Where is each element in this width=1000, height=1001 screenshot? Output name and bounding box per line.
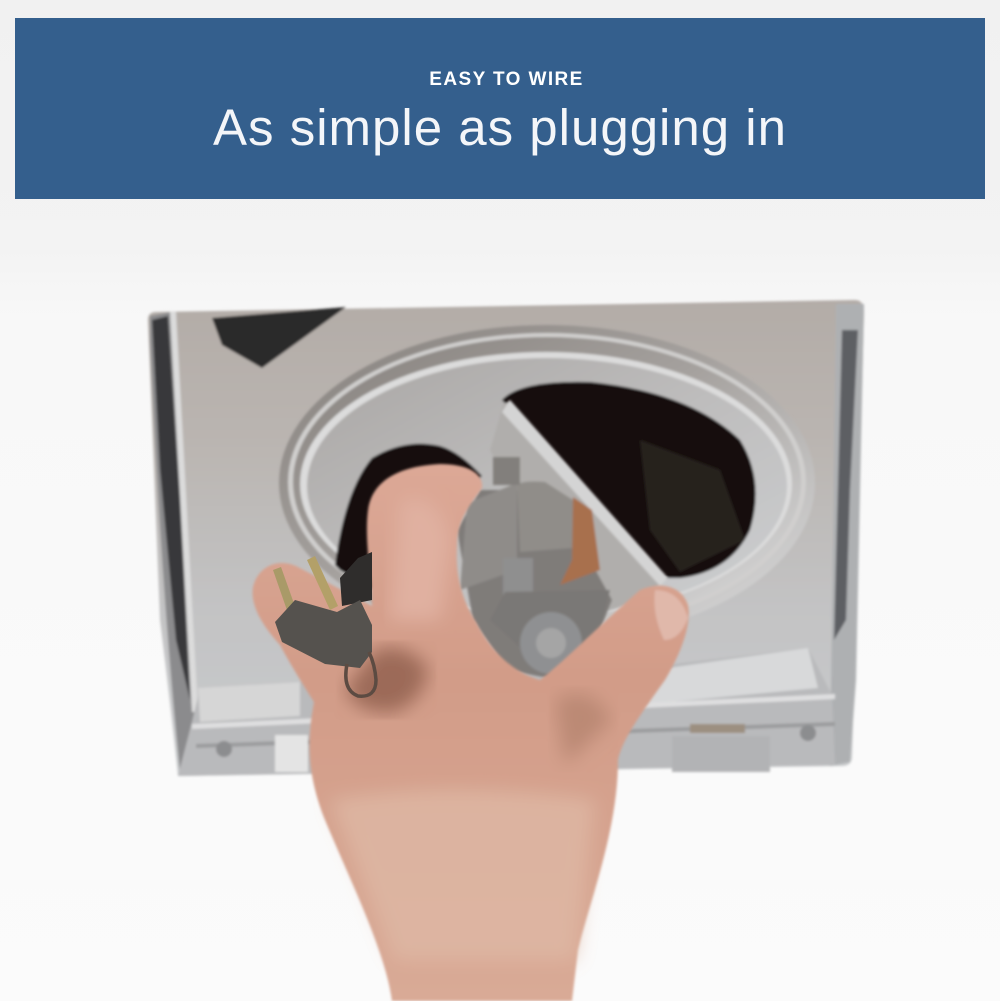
fan ring and opening (279, 325, 815, 641)
motor (457, 400, 668, 680)
hand (253, 464, 689, 1001)
plug (273, 552, 376, 696)
banner (15, 18, 985, 199)
housing (148, 300, 864, 776)
eyebrow heading: EASY TO WIRE (429, 69, 584, 90)
headline: As simple as plugging in (213, 99, 787, 156)
